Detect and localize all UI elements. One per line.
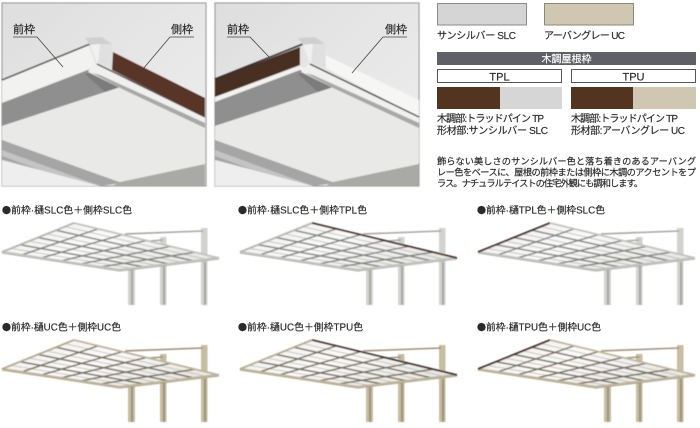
- carport variant: TPL + SLC: ●前枠·樋TPL色＋側枠SLC色: [477, 204, 605, 216]
- heading: wood-grain roof frame: 木調屋根枠: [542, 52, 592, 66]
- TPL description: 木調部:トラッドパイン TP: [437, 113, 544, 125]
- carport variant: UC + UC: ●前枠·樋UC色＋側枠UC色: [2, 320, 121, 334]
- swatch: urban gray UC: アーバングレー UC: [544, 29, 625, 42]
- label: side frame: 側枠: [385, 22, 407, 36]
- carport variant: TPU + UC: [477, 320, 695, 422]
- TPL description: 形材部:サンシルバー SLC: [437, 124, 548, 137]
- label: front frame: 前枠: [13, 22, 35, 36]
- carport variant: TPL + SLC: [477, 204, 695, 305]
- panel: front frame wood-grain photo: [215, 3, 419, 186]
- carport variant: TPU + UC: ●前枠·樋TPU色＋側枠UC色: [477, 320, 601, 334]
- TPU title box: TPU: [622, 72, 645, 84]
- description paragraph: [437, 156, 697, 188]
- label: side frame: [143, 22, 194, 69]
- description paragraph: 飾らない美しさのサンシルバー色と落ち着きのあるアーバング: [437, 156, 696, 166]
- TPU swatch: [571, 87, 696, 109]
- panel: TPL: [437, 70, 562, 137]
- carport variant: SLC + TPL: [238, 204, 457, 305]
- panel: TPU: [571, 70, 696, 137]
- carport variant: UC + UC: [2, 320, 219, 422]
- panel: side frame wood-grain photo: [2, 3, 206, 186]
- TPU description: 木調部:トラッドパイン TP: [571, 113, 678, 125]
- carport variant: SLC + SLC: ●前枠·樋SLC色＋側枠SLC色: [2, 204, 132, 216]
- label: side frame: 側枠: [171, 22, 193, 36]
- label: front frame: 前枠: [227, 22, 249, 36]
- swatch: sun silver SLC: サンシルバー SLC: [437, 30, 516, 42]
- TPL title box: TPL: [489, 72, 510, 84]
- carport variant: UC + TPU: ●前枠·樋UC色＋側枠TPU色: [238, 320, 363, 334]
- carport variant: SLC + TPL: ●前枠·樋SLC色＋側枠TPL色: [238, 204, 367, 216]
- label: front frame: [227, 22, 270, 58]
- TPL description: [437, 113, 548, 137]
- label: side frame: [352, 22, 407, 73]
- swatch: sun silver SLC: [437, 4, 526, 42]
- carport variant: UC + TPU: [238, 320, 457, 422]
- TPL swatch: [437, 87, 562, 109]
- TPU description: [571, 113, 685, 137]
- label: front frame: [13, 22, 63, 67]
- carport variant: SLC + SLC: [2, 204, 219, 305]
- description paragraph: ラス。ナチュラルテイストの住宅外観にも調和します。: [437, 178, 643, 188]
- description paragraph: レー色をベースに、屋根の前枠または側枠に木調のアクセントをプ: [437, 166, 697, 178]
- TPU description: 形材部:アーバングレー UC: [571, 124, 685, 137]
- swatch: urban gray UC: [544, 4, 634, 42]
- heading: wood-grain roof frame: [437, 52, 696, 66]
